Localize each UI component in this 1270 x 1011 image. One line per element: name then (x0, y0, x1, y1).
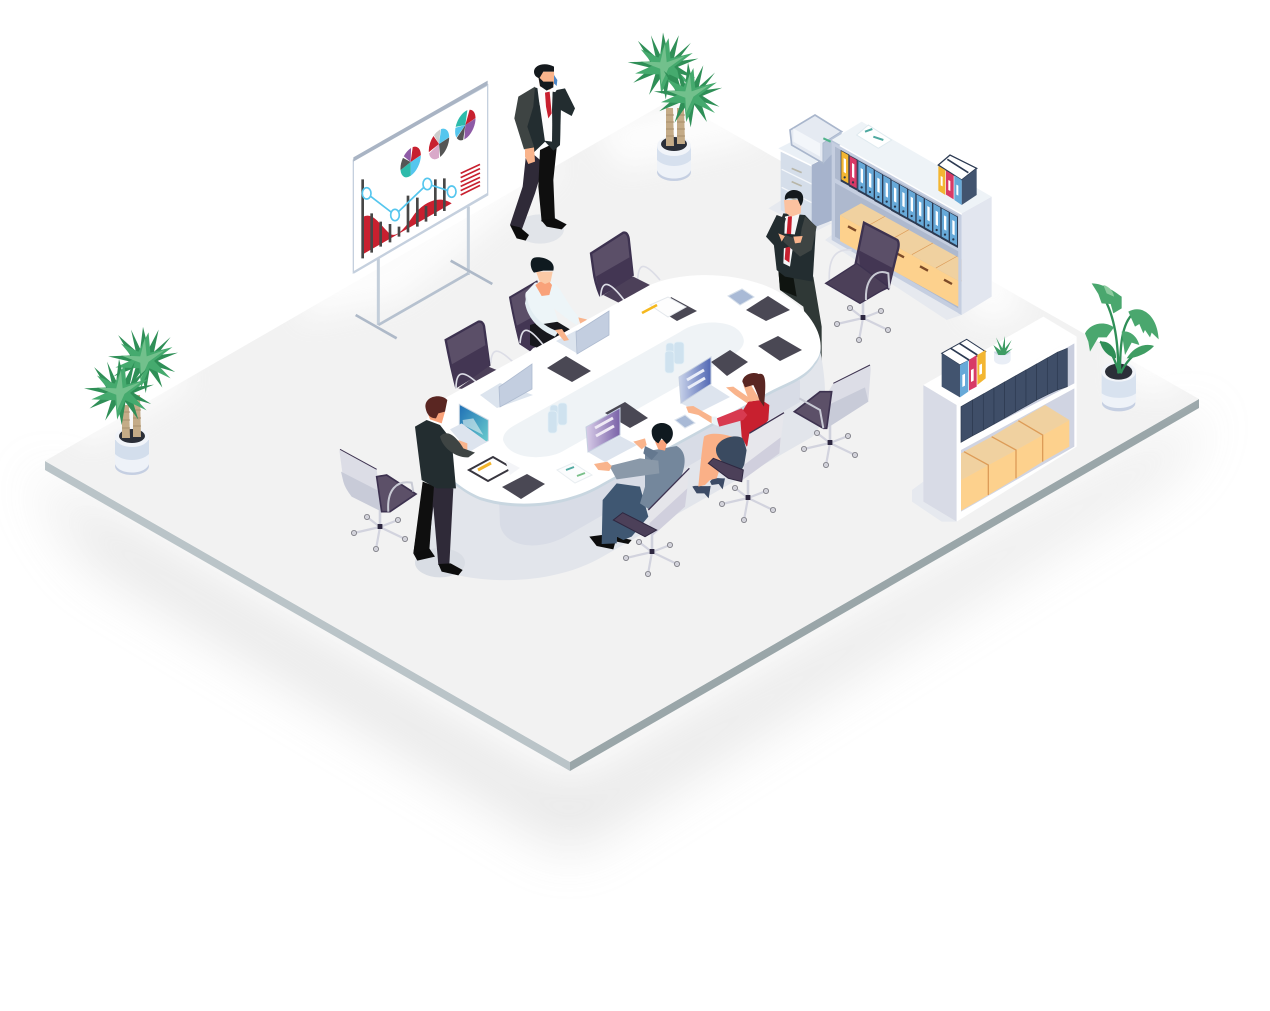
shelf front strip (958, 215, 962, 315)
shoes (413, 548, 463, 575)
chair body (794, 365, 871, 428)
red text stripes (461, 164, 480, 195)
table items (469, 289, 802, 499)
woman at back of table with chair (510, 257, 587, 350)
hand near (686, 406, 712, 423)
shelf side (962, 197, 992, 315)
chair back (510, 282, 553, 350)
arm (440, 433, 475, 457)
hair (785, 190, 803, 206)
cabinet top (778, 135, 833, 165)
face (536, 272, 553, 284)
legs (530, 318, 570, 350)
middle shelf (834, 180, 960, 250)
man with crossed arms (766, 190, 822, 363)
white glow near the floor's back corner (60, 90, 1180, 445)
printer (790, 115, 842, 163)
laptop blue (679, 357, 730, 412)
legs (602, 483, 648, 544)
laptop screen (459, 404, 488, 450)
torso (740, 400, 769, 447)
plant: back yucca (628, 33, 722, 181)
blouse (525, 282, 579, 325)
head (537, 72, 555, 90)
water bottles left (548, 403, 567, 433)
legs (413, 483, 453, 565)
laptop base (450, 423, 487, 452)
hands (594, 438, 647, 471)
stems (1100, 297, 1147, 373)
figure and chair (589, 423, 689, 549)
shelf floor shadow (912, 482, 957, 522)
hair (425, 396, 447, 418)
hand right (578, 317, 587, 325)
back (446, 322, 489, 387)
hair (742, 373, 765, 407)
shoes (692, 478, 725, 498)
printed report (557, 463, 592, 483)
man in grey suit with chair (589, 423, 689, 577)
floor top (45, 99, 1199, 762)
shoes (589, 535, 632, 549)
wheel base (719, 480, 776, 523)
skirt (716, 436, 748, 470)
right arm (553, 88, 575, 116)
pot (1101, 362, 1136, 411)
chair: right empty (794, 365, 871, 468)
leaves (1092, 283, 1122, 313)
shelf interior (835, 147, 958, 308)
armrest (491, 351, 513, 363)
jacket (523, 87, 561, 156)
chair: front left (339, 449, 416, 552)
water bottles right (665, 342, 684, 373)
jacket (415, 420, 456, 488)
chair seat (708, 458, 743, 482)
man on phone (510, 64, 575, 244)
shelf top (923, 317, 1077, 405)
lower interior (961, 388, 1074, 512)
cabinet front (781, 152, 812, 228)
chair: back left (446, 322, 513, 390)
pencil (642, 305, 657, 313)
chair: back right (591, 233, 660, 303)
meeting table (418, 275, 825, 580)
cartons (961, 405, 1069, 511)
board panel (353, 85, 488, 273)
phone (554, 75, 557, 86)
legs (778, 270, 822, 363)
carton tops (961, 405, 1069, 480)
folder (547, 356, 591, 382)
legs (510, 148, 544, 230)
binders row (841, 150, 958, 248)
armrest front (456, 374, 478, 388)
neck and chest (535, 282, 552, 296)
small potted plant (993, 336, 1013, 364)
floor slab (45, 99, 1199, 771)
left arm (514, 87, 535, 149)
folder (502, 474, 545, 499)
floor shadow (415, 548, 465, 577)
table pedestal (499, 380, 800, 545)
cabinet shadow (768, 200, 832, 232)
paper stack (857, 125, 892, 148)
table floor shadow (418, 350, 825, 580)
wheel base (801, 425, 858, 468)
face (743, 383, 760, 402)
floor drop shadow (30, 410, 1210, 850)
jacket (773, 213, 816, 282)
clipboard (650, 297, 697, 321)
jacket right flap (552, 92, 561, 151)
trunks (666, 108, 685, 146)
folder (746, 296, 790, 321)
neck (655, 438, 668, 451)
woman's hand on laptop (555, 329, 569, 341)
arm near (717, 408, 747, 427)
back (591, 233, 633, 295)
shelf front frame (957, 337, 1077, 522)
filing cabinet and printer (768, 115, 842, 232)
seat (458, 367, 498, 390)
shelf top (832, 122, 992, 213)
shelf left side (923, 385, 957, 522)
wheel base (834, 300, 891, 343)
floor left edge (45, 461, 570, 771)
board stand (356, 207, 492, 338)
pot (657, 136, 691, 181)
armrest (638, 266, 660, 290)
chair back (742, 413, 784, 481)
shadow (516, 214, 564, 244)
binder stack on shelf (938, 155, 977, 205)
shelf floor shadow (825, 235, 962, 320)
pie charts (406, 115, 470, 172)
small tablet top (728, 289, 754, 305)
bookshelf: back right (825, 122, 992, 320)
bookshelf: right front (912, 317, 1077, 522)
hands (778, 233, 803, 243)
seat (603, 277, 650, 303)
leaves (108, 327, 178, 393)
table centre inlay (503, 323, 744, 457)
bars (363, 178, 444, 258)
figure and chair (686, 373, 784, 498)
hair (531, 257, 554, 273)
jacket (640, 446, 685, 510)
shirt (537, 87, 553, 142)
hand (458, 440, 467, 450)
standing man with laptop (413, 396, 488, 577)
table top (424, 275, 821, 504)
shelf back panel (832, 142, 962, 315)
legs (698, 434, 740, 487)
hair (652, 423, 673, 444)
chair: right of shelf (826, 223, 899, 343)
carton fronts (961, 420, 1069, 511)
pot (115, 427, 149, 475)
tablet clipboard (469, 457, 520, 481)
binder stack (942, 339, 986, 397)
cabinet side (812, 153, 833, 228)
carton tape (964, 421, 1043, 495)
drawers (782, 169, 812, 203)
leaves (628, 33, 698, 99)
plant: left yucca (84, 327, 178, 475)
woman in red with chair (686, 373, 784, 523)
floor right edge (570, 399, 1199, 771)
shoes (510, 218, 567, 241)
presentation board (353, 81, 492, 338)
laptop purple (586, 408, 637, 462)
shirt (783, 213, 800, 267)
upper interior (961, 343, 1074, 442)
trunks (122, 395, 141, 438)
hand arm far (726, 387, 750, 403)
binders row (961, 348, 1067, 442)
chair seat (613, 513, 657, 537)
jacket left lapel (528, 87, 545, 156)
tie (545, 92, 552, 118)
chair body (339, 449, 416, 512)
laptop grey (480, 364, 533, 408)
armrest front (601, 284, 624, 300)
arms (766, 215, 802, 250)
tie (785, 216, 792, 263)
phone on table (675, 415, 695, 428)
armrest (520, 330, 543, 345)
chair back (648, 468, 689, 537)
folder (758, 336, 802, 361)
beard and hair (534, 64, 554, 91)
plant: monstera (1085, 283, 1159, 411)
cartons (840, 203, 981, 308)
folder (711, 350, 748, 376)
folder (605, 402, 648, 428)
left hand (525, 147, 535, 164)
neck (428, 412, 445, 423)
wheel base (623, 534, 680, 577)
laptop grey woman (556, 311, 609, 354)
wheel base (351, 509, 408, 552)
face (784, 200, 802, 217)
table rim (424, 278, 821, 507)
chair body (826, 223, 899, 303)
area chart (363, 200, 452, 254)
line chart (362, 178, 456, 221)
arm (609, 458, 659, 479)
